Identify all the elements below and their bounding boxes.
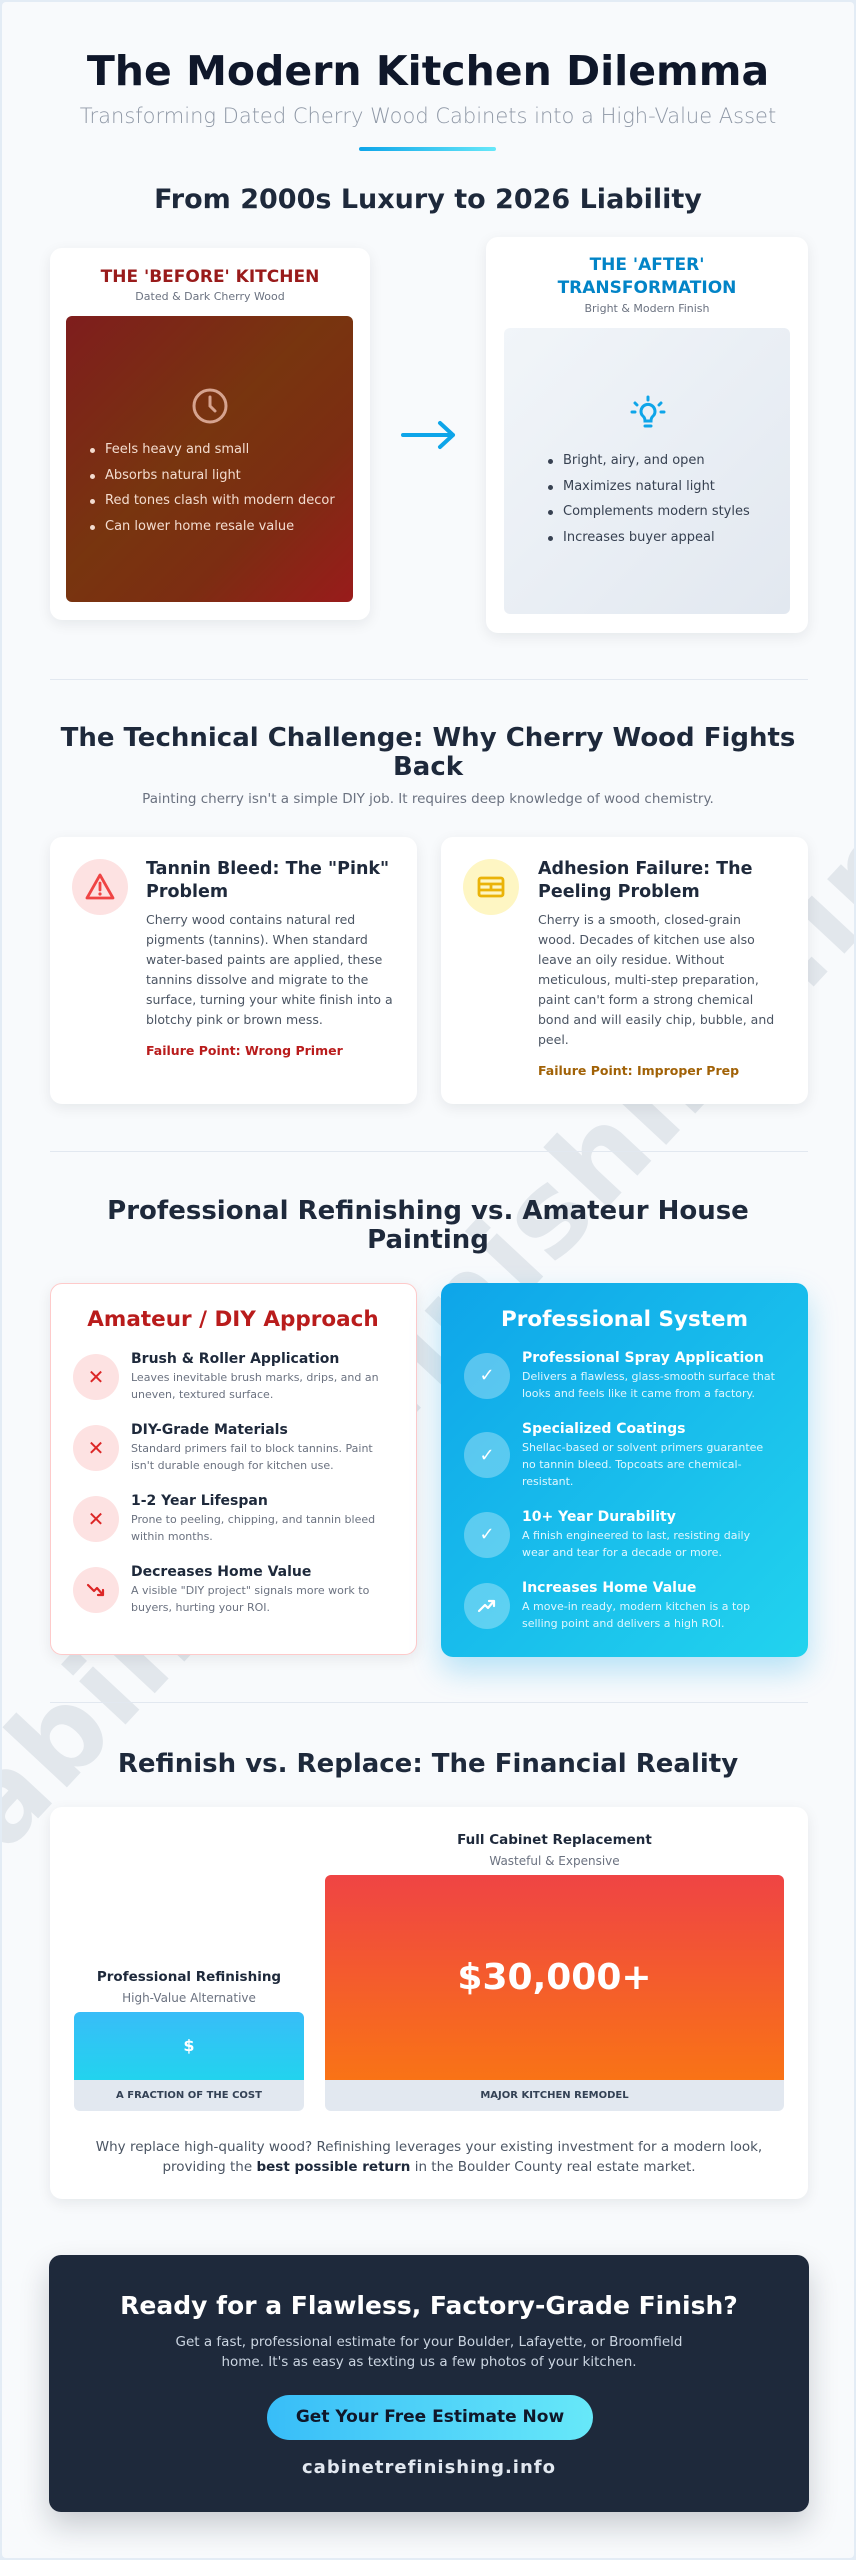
arrow	[401, 420, 456, 450]
item: brush: Leaves inevitable brush marks, drips, and an uneven, textured surface.	[131, 1371, 379, 1401]
before subheading: Dated & Dark Cherry Wood	[135, 290, 285, 303]
cta text: Get a fast, professional estimate for your Boulder, Lafayette, or Broomfield home. It's as easy as texting us a few photos of your kitchen.	[176, 2334, 682, 2370]
after bullets	[548, 453, 750, 544]
subtitle: Transforming Dated Cherry Wood Cabinets into a High-Value Asset	[80, 104, 776, 128]
before bullets: Feels heavy and small	[105, 442, 249, 457]
adhesion text: Peeling Problem	[538, 882, 700, 902]
after bullets: Bright, airy, and open	[563, 453, 705, 468]
cta button	[267, 2395, 593, 2440]
heading: professional vs amateur: Professional Refinishing vs. Amateur House Painting	[107, 1196, 749, 1255]
item: coatings: resistant.	[522, 1475, 573, 1488]
item: durability: wear and tear for a decade or more.	[522, 1546, 722, 1559]
bar: refinishing cost	[74, 2012, 304, 2111]
item: durability: A finish engineered to last, resisting daily	[522, 1529, 750, 1542]
item: coatings	[464, 1421, 763, 1488]
adhesion text: Failure Point: Improper Prep	[538, 1063, 739, 1078]
item: brush	[73, 1351, 379, 1401]
item: lifespan: Prone to peeling, chipping, and tannin bleed within months.	[131, 1513, 375, 1543]
item: durability: ✓	[479, 1524, 495, 1545]
panel: financial comparison	[50, 1807, 808, 2199]
refinishing label: High-Value Alternative	[122, 1991, 256, 2005]
item: lifespan: ✕	[88, 1506, 104, 1530]
item: durability: 10+ Year Durability	[522, 1509, 676, 1525]
item: value down: Decreases Home Value	[131, 1564, 311, 1580]
bar: refinishing cost: $	[183, 2036, 195, 2055]
item: spray	[464, 1350, 775, 1400]
panel: adhesion failure	[441, 837, 808, 1104]
item: value down: A visible "DIY project" signals more work to buyers, hurting your ROI.	[131, 1584, 369, 1614]
item: lifespan	[73, 1493, 375, 1543]
after bullets: Complements modern styles	[563, 504, 750, 519]
tannin text: Cherry wood contains natural red pigments (tannins). When standard water-based paints are applied, these tannins dissolve and migrate to the surface, turning your white finish into a blotchy pink or brown mess.	[146, 912, 393, 1027]
panel: before kitchen	[50, 248, 370, 620]
website url: cabinetrefinishing.info	[302, 2457, 556, 2478]
bar: replacement cost	[325, 1875, 784, 2111]
icon: clock	[192, 388, 228, 424]
item: coatings: no tannin bleed. Topcoats are chemical-	[522, 1458, 742, 1471]
bar: replacement cost: $30,000+	[457, 1957, 652, 1998]
adhesion text: leave an oily residue. Without	[538, 952, 724, 967]
adhesion text: bond and will easily chip, bubble, and	[538, 1012, 774, 1027]
cta button: Get Your Free Estimate Now	[296, 2407, 564, 2427]
item: coatings: Specialized Coatings	[522, 1421, 685, 1437]
financial summary text: Why replace high-quality wood? Refinishing leverages your existing investment for a modern look, providing the best possible return in the Boulder County real estate market.	[96, 2139, 762, 2175]
before bullets: Can lower home resale value	[105, 518, 294, 534]
item: spray: looks and feels like it came from a factory.	[522, 1387, 755, 1400]
heading: technical challenge: The Technical Challenge: Why Cherry Wood Fights Back	[61, 723, 795, 782]
item: coatings: ✓	[479, 1444, 495, 1466]
panel: call to action	[49, 2255, 809, 2512]
item: spray: Delivers a flawless, glass-smooth surface that	[522, 1370, 775, 1383]
item: value up: A move-in ready, modern kitchen is a top	[522, 1600, 750, 1613]
adhesion text	[538, 859, 774, 1078]
replacement label: Wasteful & Expensive	[489, 1854, 620, 1868]
technical subtitle: Painting cherry isn't a simple DIY job. It requires deep knowledge of wood chemistry.	[142, 791, 714, 807]
item: brush: ✕	[88, 1364, 104, 1388]
before bullets: Absorbs natural light	[105, 468, 241, 482]
professional list	[464, 1350, 775, 1630]
bar: refinishing cost: A FRACTION OF THE COST	[116, 2090, 262, 2101]
bar: replacement cost: MAJOR KITCHEN REMODEL	[480, 2090, 629, 2101]
item: durability	[464, 1509, 750, 1559]
item: spray: Professional Spray Application	[522, 1350, 764, 1366]
title: The Modern Kitchen Dilemma	[87, 47, 769, 95]
item: brush: Brush & Roller Application	[131, 1351, 339, 1367]
adhesion text: wood. Decades of kitchen use also	[538, 932, 755, 947]
after bullets: Maximizes natural light	[563, 478, 715, 494]
item: materials: ✕	[88, 1436, 104, 1460]
item: value up: Increases Home Value	[522, 1580, 696, 1596]
icon: light bulb	[630, 396, 666, 428]
panel: after transformation	[486, 237, 808, 633]
amateur heading: Amateur / DIY Approach	[87, 1307, 379, 1332]
panel: professional system	[441, 1283, 808, 1657]
replacement label	[457, 1832, 652, 1868]
item: value up	[464, 1580, 750, 1630]
item: value up: selling point and delivers a high ROI.	[522, 1617, 725, 1630]
tannin text: Tannin Bleed: The "Pink" Problem	[146, 859, 389, 902]
after heading: TRANSFORMATION	[558, 278, 736, 298]
amateur list	[73, 1351, 379, 1614]
item: spray: ✓	[479, 1365, 495, 1386]
after subheading: Bright & Modern Finish	[584, 302, 710, 315]
before heading: THE 'BEFORE' KITCHEN	[101, 267, 319, 287]
professional heading: Professional System	[501, 1307, 748, 1332]
before bullets: Red tones clash with modern decor	[105, 493, 335, 508]
before image box	[66, 316, 353, 602]
replacement label: Full Cabinet Replacement	[457, 1832, 652, 1848]
adhesion text: Adhesion Failure: The	[538, 859, 752, 879]
adhesion text: peel.	[538, 1032, 569, 1047]
item: materials: DIY-Grade Materials	[131, 1422, 288, 1438]
accent bar	[359, 147, 496, 151]
after heading	[558, 255, 736, 298]
panel: tannin bleed	[50, 837, 417, 1104]
adhesion text: Cherry is a smooth, closed-grain	[538, 912, 741, 927]
adhesion text: meticulous, multi-step preparation,	[538, 972, 759, 987]
after image box	[504, 328, 790, 614]
refinishing label: Professional Refinishing	[97, 1969, 281, 1985]
heading: refinish vs replace: Refinish vs. Replace: The Financial Reality	[118, 1749, 738, 1779]
item: value down	[73, 1564, 369, 1614]
item: lifespan: 1-2 Year Lifespan	[131, 1493, 268, 1509]
refinishing label	[97, 1969, 281, 2005]
tannin text: Failure Point: Wrong Primer	[146, 1043, 343, 1058]
before bullets	[90, 442, 335, 534]
item: materials	[73, 1422, 373, 1472]
item: materials: Standard primers fail to block tannins. Paint isn't durable enough for kitchen use.	[131, 1442, 373, 1472]
icon: layers	[463, 859, 519, 915]
after heading: THE 'AFTER'	[590, 255, 704, 275]
after bullets: Increases buyer appeal	[563, 530, 715, 544]
item: coatings: Shellac-based or solvent primers guarantee	[522, 1441, 763, 1454]
cta heading: Ready for a Flawless, Factory-Grade Finish?	[120, 2291, 738, 2320]
tannin text	[146, 859, 393, 1058]
heading: from luxury to liability: From 2000s Luxury to 2026 Liability	[154, 184, 702, 215]
icon: warning	[72, 859, 128, 915]
adhesion text: paint can't form a strong chemical	[538, 992, 753, 1007]
panel: amateur DIY	[50, 1283, 417, 1655]
